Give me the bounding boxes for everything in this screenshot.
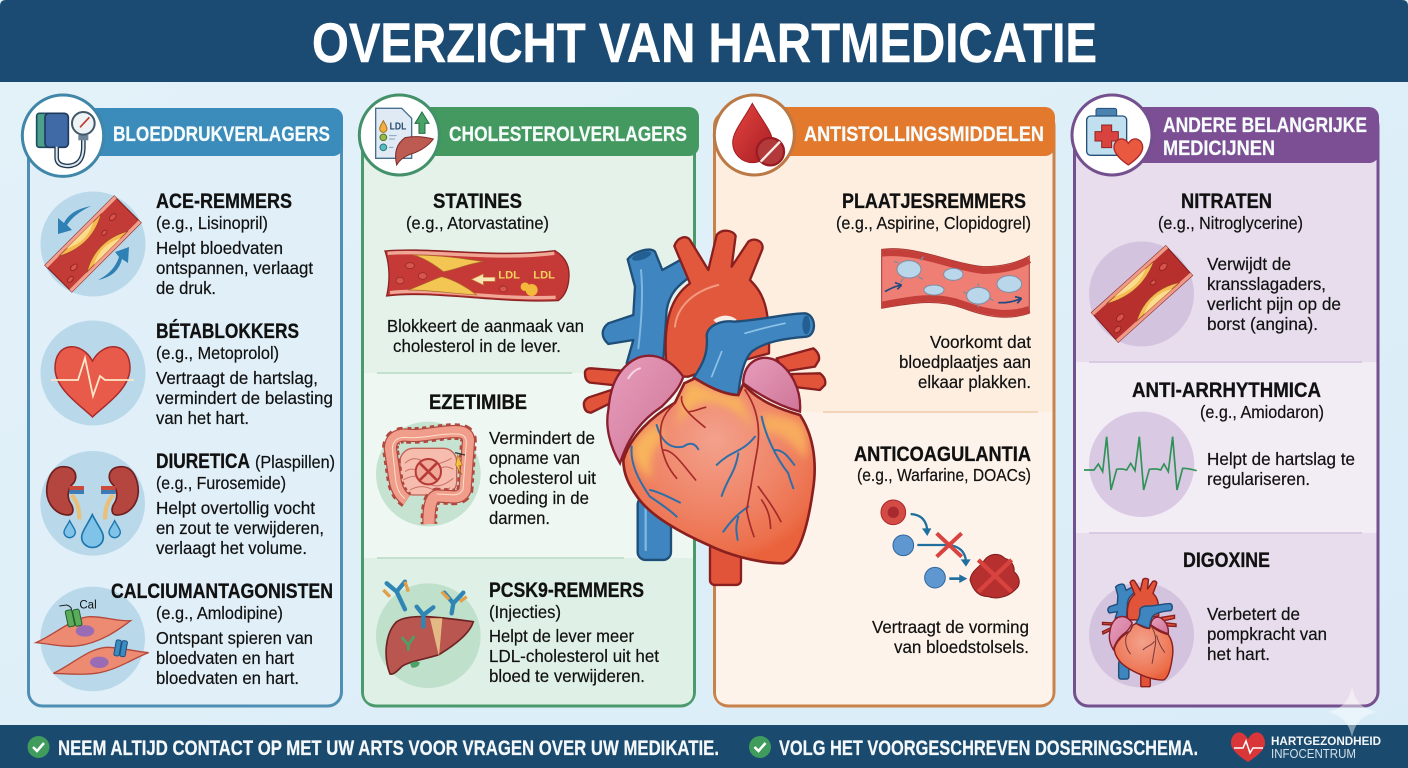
heading: nitraten: NITRATEN	[1181, 190, 1272, 213]
logo: hartgezondheid infocentrum	[1231, 732, 1381, 762]
icon: heart with pulse	[40, 320, 146, 426]
superior vena cava	[603, 249, 695, 363]
item: plaatjesremmers	[836, 190, 1031, 392]
icon: medicine bottle and heart	[1072, 95, 1152, 175]
description: calciumantagonisten: Ontspant spieren van	[156, 628, 313, 648]
description: plaatjesremmers: elkaar plakken.	[918, 372, 1031, 392]
heading: diuretica: (Plaspillen)	[255, 452, 335, 472]
icon: blood pressure cuff	[22, 95, 104, 176]
sparkle watermark	[1328, 687, 1376, 737]
description: betablokkers: vermindert de belasting	[156, 388, 333, 408]
description: ACE-remmers	[156, 238, 313, 298]
panel header: antistollingsmiddelen	[760, 107, 1055, 156]
icon: muscle cells and calcium channels	[36, 587, 149, 691]
panel header: andere belangrijke medicijnen	[1118, 107, 1379, 163]
panel header: bloeddrukverlagers: BLOEDDRUKVERLAGERS	[113, 122, 330, 146]
description: plaatjesremmers: bloedplaatjes aan	[899, 352, 1031, 372]
ventricles	[623, 378, 815, 563]
item: ezetimibe	[376, 391, 596, 528]
example: Nitroglycerine: (e.g., Nitroglycerine)	[1158, 213, 1303, 233]
central anatomical heart	[584, 231, 825, 585]
footer bar	[0, 725, 1408, 768]
heading: statines: STATINES	[433, 190, 522, 213]
description: ezetimibe	[489, 428, 596, 528]
heading: ACE-remmers: ACE-REMMERS	[156, 190, 292, 213]
inferior vena cava	[638, 497, 671, 560]
description: anti-arrhythmica: Helpt de hartslag te	[1207, 449, 1355, 469]
illustration: artery with platelets	[882, 249, 1029, 317]
footer note 2: VOLG HET VOORGESCHREVEN DOSERINGSCHEMA.	[779, 737, 1198, 760]
example: Atorvastatine: (e.g., Atorvastatine)	[406, 213, 549, 233]
description: betablokkers: Vertraagt de hartslag,	[156, 368, 318, 388]
item: anticoagulantia	[854, 443, 1031, 657]
description: ACE-remmers: Helpt bloedvaten	[156, 238, 283, 258]
description: nitraten: verlicht pijn op de	[1207, 294, 1341, 314]
description: PCSK9-remmers: LDL-cholesterol uit het	[489, 646, 659, 666]
icon: small anatomical heart	[1089, 578, 1194, 688]
description: plaatjesremmers	[899, 332, 1031, 392]
description: betablokkers: van het hart.	[156, 408, 249, 428]
description: digoxine: het hart.	[1207, 644, 1270, 664]
icon: muscle cells and calcium channels: Cal	[79, 597, 97, 611]
icon: check mark 1	[28, 736, 50, 758]
description: ezetimibe: Vermindert de	[489, 428, 595, 448]
illustration: clotting cascade blocked	[881, 500, 1019, 598]
icon: ECG trace	[1084, 412, 1197, 517]
panel header: andere belangrijke medicijnen: ANDERE BELANGRIJKE	[1163, 113, 1367, 137]
heading: PCSK9-remmers: PCSK9-REMMERS	[489, 579, 644, 602]
description: betablokkers	[156, 368, 333, 428]
item: ACE-remmers	[40, 190, 313, 298]
description: anti-arrhythmica	[1207, 449, 1355, 489]
icon: blood drop with clot ban	[714, 95, 794, 175]
description: anticoagulantia: Vertraagt de vorming	[872, 617, 1029, 637]
left atrium	[743, 358, 800, 412]
description: ezetimibe: voeding in de	[489, 488, 589, 508]
item: statines	[385, 190, 584, 356]
item: anti-arrhythmica	[1084, 379, 1355, 517]
description: nitraten	[1207, 254, 1341, 334]
item: PCSK9-remmers	[376, 579, 659, 688]
example: Metoprolol: (e.g., Metoprolol)	[156, 343, 279, 363]
panel header: cholesterolverlagers	[405, 107, 699, 156]
example: Furosemide: (e.g., Furosemide)	[156, 473, 286, 493]
panel header: bloeddrukverlagers	[70, 108, 343, 156]
item: nitraten	[1089, 190, 1341, 346]
panel: antistollingsmiddelen	[714, 95, 1055, 706]
title banner	[0, 0, 1408, 82]
description: ezetimibe: opname van	[489, 448, 580, 468]
heading: plaatjesremmers: PLAATJESREMMERS	[842, 190, 1026, 213]
right atrium	[607, 356, 683, 463]
description: digoxine: pompkracht van	[1207, 624, 1327, 644]
description: plaatjesremmers: Voorkomt dat	[930, 332, 1031, 352]
heading: diuretica	[156, 450, 335, 473]
icon: liver with antibodies	[376, 582, 481, 688]
description: diuretica	[156, 498, 324, 558]
heading: calciumantagonisten: CALCIUMANTAGONISTEN	[111, 580, 333, 603]
description: diuretica: verlaagt het volume.	[156, 538, 307, 558]
illustration: artery with LDL plaque: LDL	[498, 269, 520, 281]
aortic arch gap	[713, 316, 737, 323]
description: ezetimibe: cholesterol uit	[489, 468, 596, 488]
icon: intestines with block symbol	[376, 422, 481, 526]
description: calciumantagonisten	[156, 628, 313, 688]
icon: LDL report and liver	[359, 95, 439, 175]
title: OVERZICHT VAN HARTMEDICATIE	[312, 11, 1097, 74]
description: PCSK9-remmers: bloed te verwijderen.	[489, 666, 645, 686]
example: Warfarine, DOACs: (e.g., Warfarine, DOACs)	[857, 465, 1031, 485]
description: nitraten: borst (angina).	[1207, 314, 1318, 334]
heading: anticoagulantia: ANTICOAGULANTIA	[854, 443, 1031, 466]
heading: anti-arrhythmica: ANTI-ARRHYTHMICA	[1132, 379, 1321, 402]
description: ezetimibe: darmen.	[489, 508, 550, 528]
panel: bloeddrukverlagers	[22, 95, 343, 706]
icon: kidneys and drops	[40, 451, 145, 556]
item: digoxine	[1089, 549, 1327, 688]
footer note 1: NEEM ALTIJD CONTACT OP MET UW ARTS VOOR VRAGEN OVER UW MEDIKATIE.	[58, 737, 719, 760]
descending vessel	[710, 543, 741, 585]
icon: blood vessel with arrows	[40, 192, 146, 296]
description: anti-arrhythmica: regulariseren.	[1207, 469, 1310, 489]
item: diuretica	[40, 450, 335, 558]
description: statines	[387, 316, 584, 356]
icon: check mark 2	[749, 736, 771, 758]
heading: betablokkers: BÉTABLOKKERS	[156, 320, 299, 343]
description: ACE-remmers: ontspannen, verlaagt	[156, 258, 313, 278]
description: digoxine	[1207, 604, 1327, 664]
icon: widened coronary artery	[1089, 242, 1194, 346]
panel: cholesterolverlagers	[359, 95, 699, 706]
heading: digoxine: DIGOXINE	[1183, 549, 1270, 572]
description: statines: Blokkeert de aanmaak van	[387, 316, 584, 336]
example: Lisinopril: (e.g., Lisinopril)	[156, 213, 268, 233]
logo: hartgezondheid infocentrum: INFOCENTRUM	[1271, 747, 1356, 761]
illustration: artery with LDL plaque	[385, 250, 569, 301]
illustration: artery with LDL plaque: LDL	[533, 269, 555, 281]
icon: LDL report and liver: LDL	[390, 121, 406, 132]
panel header: cholesterolverlagers: CHOLESTEROLVERLAGERS	[449, 122, 687, 146]
description: nitraten: Verwijdt de	[1207, 254, 1291, 274]
description: ACE-remmers: de druk.	[156, 278, 216, 298]
description: anticoagulantia	[872, 617, 1029, 657]
coronary arteries	[631, 390, 794, 540]
description: PCSK9-remmers	[489, 626, 659, 686]
panel header: antistollingsmiddelen: ANTISTOLLINGSMIDDELEN	[804, 122, 1044, 146]
description: diuretica: Helpt overtollig vocht	[156, 498, 315, 518]
example: Amiodaron: (e.g., Amiodaron)	[1200, 402, 1324, 422]
example: Amlodipine: (e.g., Amlodipine)	[156, 603, 283, 623]
pulmonary veins	[584, 348, 825, 413]
description: nitraten: kransslagaders,	[1207, 274, 1326, 294]
logo: hartgezondheid infocentrum: HARTGEZONDHEID	[1271, 734, 1381, 748]
description: calciumantagonisten: bloedvaten en hart	[156, 648, 294, 668]
aorta	[666, 231, 769, 377]
panel header: andere belangrijke medicijnen: MEDICIJNEN	[1163, 136, 1275, 160]
item: calciumantagonisten	[36, 580, 333, 691]
heading: ezetimibe: EZETIMIBE	[429, 391, 527, 414]
example: injecties: (Injecties)	[489, 602, 561, 622]
heading: diuretica: DIURETICA	[156, 450, 250, 473]
description: PCSK9-remmers: Helpt de lever meer	[489, 626, 634, 646]
pulmonary artery	[693, 313, 814, 395]
description: diuretica: en zout te verwijderen,	[156, 518, 324, 538]
description: statines: cholesterol in de lever.	[393, 336, 561, 356]
description: digoxine: Verbetert de	[1207, 604, 1300, 624]
description: anticoagulantia: van bloedstolsels.	[894, 637, 1029, 657]
panel: andere belangrijke medicijnen	[1072, 95, 1379, 706]
item: betablokkers	[40, 320, 333, 428]
example: Aspirine, Clopidogrel: (e.g., Aspirine, Clopidogrel)	[836, 213, 1031, 233]
description: calciumantagonisten: bloedvaten en hart.	[156, 668, 299, 688]
